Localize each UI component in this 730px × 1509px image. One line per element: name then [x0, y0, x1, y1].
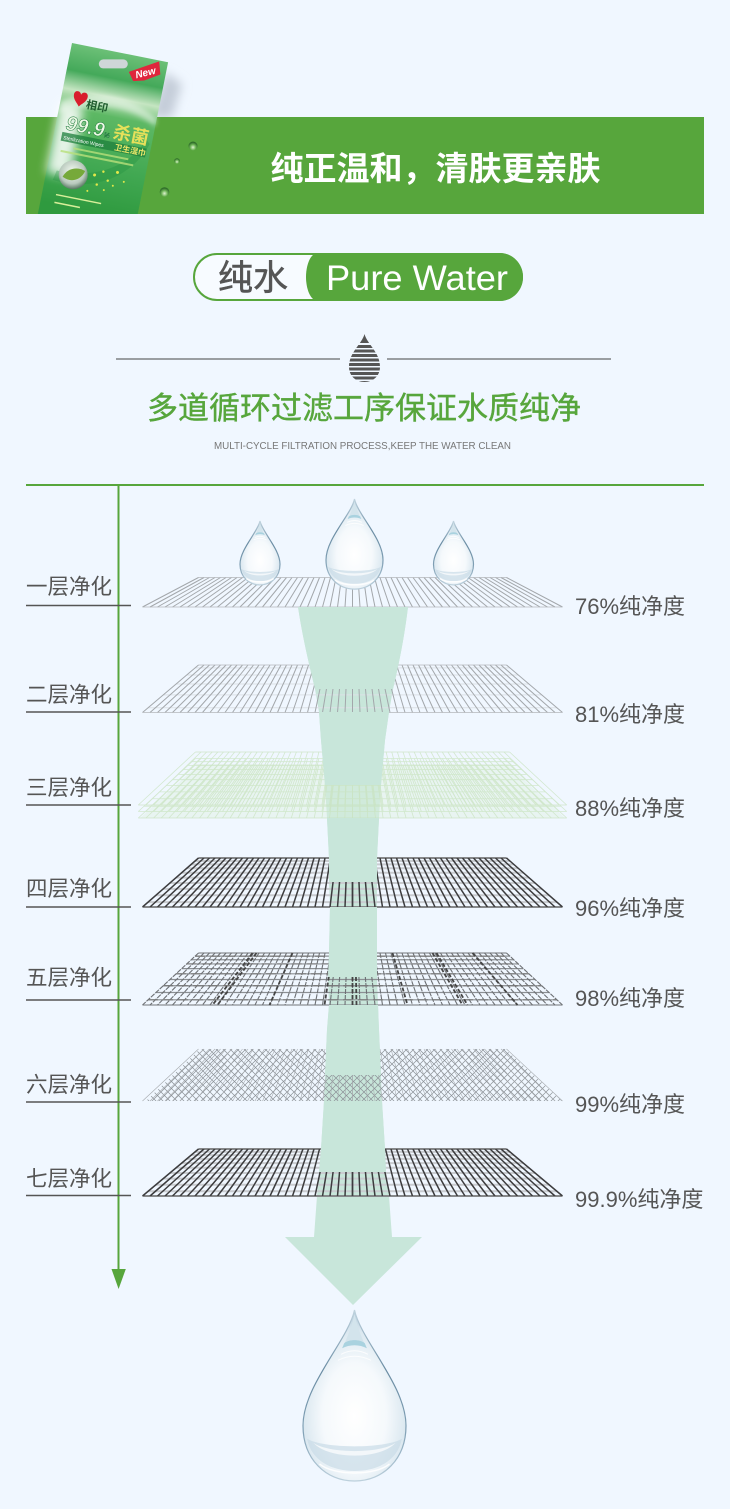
banner title: 纯正温和，清肤更亲肤 [270, 150, 600, 187]
water drop centre [326, 499, 383, 589]
yellow sparkle dots [86, 170, 125, 192]
top green rule and vertical arrow [26, 484, 704, 1289]
water drop left [240, 521, 280, 585]
purity 98%: 98%纯净度 [575, 986, 685, 1011]
mesh 4 [142, 858, 562, 907]
layer label 3 [26, 776, 131, 805]
layer label 6 [26, 1073, 131, 1102]
funnel upper segments covering the meshes [298, 607, 408, 1172]
purity 76%: 76%纯净度 [575, 594, 685, 619]
claim: 99.9%: 99.9% [64, 113, 113, 143]
layer label 3: 三层净化 [26, 776, 112, 800]
pill label: english: Pure Water [326, 259, 508, 298]
icon: striped water drop [349, 334, 380, 382]
layer label 1 [26, 575, 131, 606]
brand logo [74, 91, 108, 112]
section ornament: lines and striped drop [116, 332, 611, 384]
mesh 5 [142, 953, 562, 1005]
layer label 5: 五层净化 [26, 966, 112, 990]
large pure water drop [303, 1310, 406, 1481]
brand logo: 相印 [85, 97, 109, 115]
icon: leaf orb [58, 160, 88, 190]
purity 99%: 99%纯净度 [575, 1092, 685, 1117]
purity 99.9%: 99.9%纯净度 [575, 1187, 703, 1212]
purity 88%: 88%纯净度 [575, 796, 685, 821]
product name: 卫生湿巾 [113, 142, 147, 158]
layer label 4 [26, 877, 131, 907]
purity 81%: 81%纯净度 [575, 702, 685, 727]
section heading: 多道循环过滤工序保证水质纯净 [147, 391, 581, 426]
layer label 4: 四层净化 [26, 877, 112, 901]
badge: New [128, 61, 160, 82]
layer label 2 [26, 683, 131, 712]
badge: New: New [134, 65, 158, 81]
layer label 7: 七层净化 [26, 1167, 112, 1191]
purity 96%: 96%纯净度 [575, 896, 685, 921]
mesh 7 [142, 1149, 562, 1196]
icon: water beads [160, 142, 198, 197]
claim: 杀菌: 杀菌 [111, 122, 151, 149]
product shadow [150, 72, 182, 118]
pill heading [194, 253, 523, 301]
water drop right [434, 521, 474, 585]
funnel base [285, 607, 422, 1305]
mesh 2 [142, 665, 562, 712]
layer label 6: 六层净化 [26, 1073, 112, 1097]
layer label 7 [26, 1167, 131, 1196]
mesh 6 [142, 1049, 562, 1101]
product package [38, 43, 168, 214]
bullet points [54, 194, 102, 208]
mesh 3 [138, 752, 567, 818]
product name [61, 131, 147, 158]
pill label: chinese: 纯水 [218, 259, 288, 298]
section subheading: MULTI-CYCLE FILTRATION PROCESS,KEEP THE WATER CLEAN [214, 441, 511, 452]
layer label 5 [26, 966, 131, 1000]
banner [26, 117, 704, 214]
mesh 1 [142, 578, 562, 607]
layer label 1: 一层净化 [26, 575, 112, 599]
small print [60, 148, 134, 166]
hang hole [99, 59, 128, 68]
product name: Sterilization Wipes [63, 135, 105, 149]
layer label 2: 二层净化 [26, 683, 112, 707]
